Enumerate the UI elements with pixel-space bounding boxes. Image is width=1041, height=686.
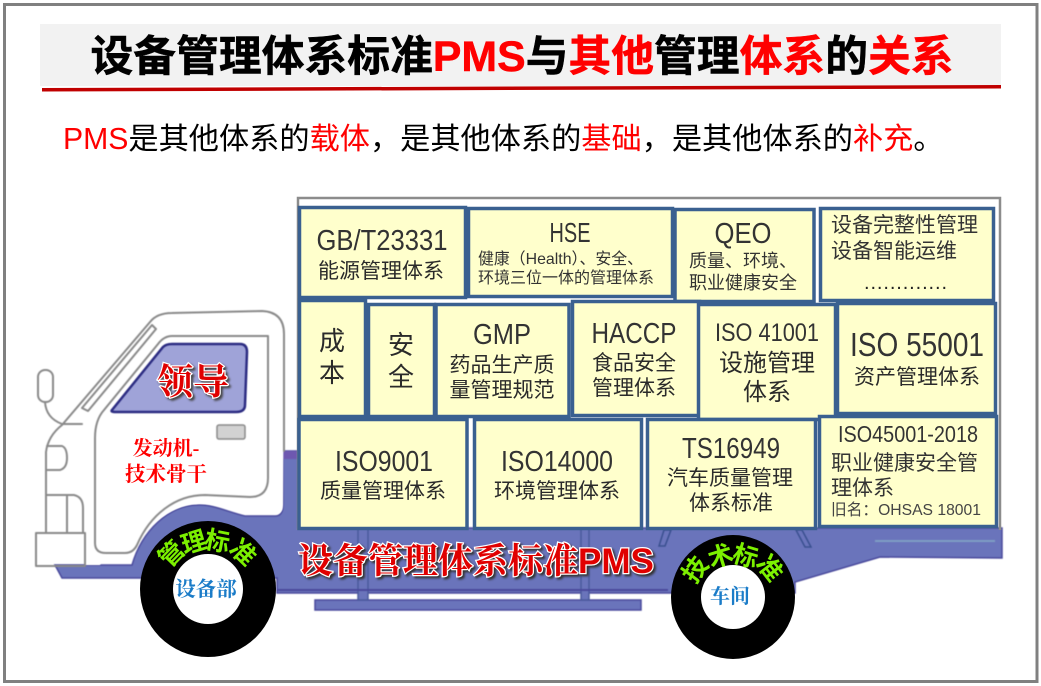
box: HACCP: 食品安全 [592, 352, 676, 375]
box: HSE: HSE [550, 217, 590, 248]
arc text: management standard: 理 [178, 526, 210, 560]
box: ISO 41001: 设施管理 [719, 350, 815, 377]
box: GB/T23331: GB/T23331 [316, 225, 448, 257]
box: equipment integrity management: 设备智能运维 [831, 240, 957, 263]
box: HSE: 环境三位一体的管理体系 [478, 268, 654, 287]
box: ISO14000: 环境管理体系 [494, 480, 620, 503]
box: ISO9001: ISO9001 [335, 446, 433, 478]
truck illustration [36, 198, 1002, 610]
wheel label: workshop: 车间 [710, 585, 750, 608]
arc text: management standard: 标 [202, 526, 232, 558]
box: GB/T23331: 能源管理体系 [318, 260, 444, 283]
box: safety [368, 304, 434, 416]
title band [40, 24, 1001, 92]
chassis label: 设备管理体系标准PMS [298, 542, 654, 581]
box: GMP: 药品生产质 [450, 354, 554, 377]
box: ISO45001-2018: 职业健康安全管 [831, 452, 978, 475]
left wheel [140, 521, 276, 657]
box: ISO 55001 [838, 304, 996, 414]
box: TS16949: TS16949 [682, 433, 780, 465]
box: HSE [468, 208, 672, 296]
box: QEO: QEO [714, 218, 772, 250]
box: TS16949: 体系标准 [689, 492, 773, 515]
box: ISO 55001: ISO 55001 [850, 326, 984, 363]
box: ISO14000: ISO14000 [501, 446, 613, 478]
box: ISO45001-2018 [820, 416, 996, 526]
box: ISO 41001: ISO 41001 [715, 319, 819, 347]
box: HACCP [572, 302, 700, 416]
box: QEO: 质量、环境、 [689, 251, 797, 271]
wheel label: equipment department: 设备部 [175, 578, 237, 601]
box: ISO9001: 质量管理体系 [320, 480, 446, 503]
label: leadership: 领导 [157, 362, 229, 402]
arc text: technical standard: 术 [705, 540, 737, 574]
box: GMP: GMP [473, 319, 531, 351]
arc text: technical standard: 准 [751, 550, 788, 587]
box: ISO 41001 [698, 304, 836, 420]
right wheel [671, 535, 795, 659]
box: cost: 本 [319, 358, 345, 388]
label: engine, technical backbone [125, 437, 207, 486]
box: TS16949: 汽车质量管理 [667, 467, 793, 490]
box: ISO 41001: 体系 [743, 379, 791, 406]
box: equipment integrity management: 设备完整性管理 [831, 214, 978, 237]
box: ISO45001-2018: 理体系 [831, 477, 894, 500]
box: ISO14000 [474, 420, 642, 528]
truck cab [36, 311, 284, 566]
arc text: technical standard: 技 [677, 552, 714, 588]
cab window [112, 344, 247, 412]
arc text: management standard: 管 [153, 536, 191, 573]
box: QEO [675, 210, 814, 302]
box: HACCP: 管理体系 [592, 377, 676, 400]
box: GB/T23331 [300, 208, 466, 298]
cargo frame [298, 198, 1000, 530]
arc text: management standard: 准 [224, 534, 261, 572]
box: GMP: 量管理规范 [450, 379, 554, 402]
box: ISO 55001: 资产管理体系 [854, 366, 980, 389]
truck chassis [55, 451, 1002, 610]
arc text: management standard [153, 526, 261, 573]
box: ISO45001-2018: ISO45001-2018 [838, 421, 978, 447]
label: engine, technical backbone: 发动机- [133, 437, 199, 460]
box: ISO45001-2018: 旧名：OHSAS 18001 [831, 501, 981, 519]
box: cost [300, 300, 366, 416]
arc text: technical standard [677, 540, 788, 588]
panel: management system boxes [299, 208, 996, 528]
label: engine, technical backbone: 技术骨干 [125, 463, 207, 486]
box: GMP [436, 304, 569, 416]
box: safety: 安 [388, 330, 414, 360]
box: equipment integrity management [820, 208, 994, 300]
title: 设备管理体系标准PMS与其他管理体系的关系 [90, 33, 954, 81]
box: QEO: 职业健康安全 [689, 273, 797, 293]
box: safety: 全 [388, 362, 414, 392]
box: TS16949 [648, 420, 816, 528]
box: HSE: 健康（Health）、安全、 [478, 250, 643, 268]
box: HACCP: HACCP [592, 318, 676, 350]
subtitle statement: PMS是其他体系的载体，是其他体系的基础，是其他体系的补充。 [63, 122, 944, 156]
box: equipment integrity management: ............. [864, 272, 947, 294]
arc text: technical standard: 标 [729, 540, 761, 574]
box: ISO9001 [299, 420, 467, 528]
box: cost: 成 [319, 326, 345, 356]
